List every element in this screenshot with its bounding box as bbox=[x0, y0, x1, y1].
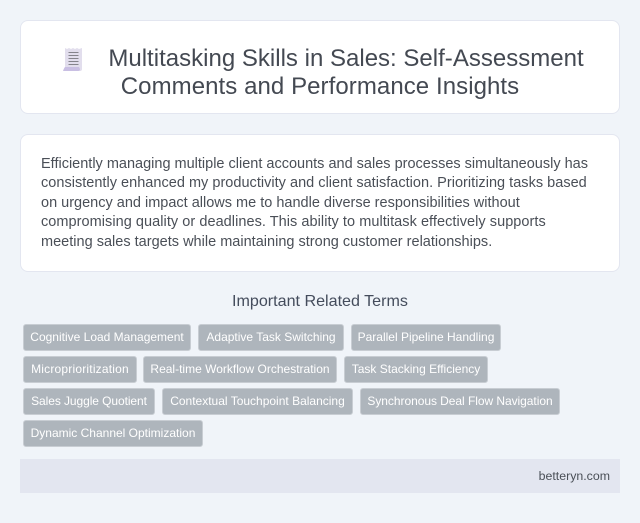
tag list: Real-time Workflow Orchestration bbox=[150, 362, 330, 376]
summary text: compromising quality or deadlines. This ability to multitask effectively supports bbox=[41, 214, 546, 230]
tag list: Sales Juggle Quotient bbox=[31, 394, 147, 408]
title: Multitasking Skills in Sales: Self-Assessment bbox=[108, 45, 584, 72]
footer brand: betteryn.com bbox=[539, 469, 610, 483]
tag list bbox=[23, 324, 560, 447]
header panel bbox=[20, 20, 620, 114]
tag list: Microprioritization bbox=[31, 362, 129, 376]
tag list: Task Stacking Efficiency bbox=[352, 362, 480, 376]
summary text bbox=[41, 156, 588, 250]
footer bar bbox=[20, 459, 620, 493]
summary text: Efficiently managing multiple client accounts and sales processes simultaneously has bbox=[41, 156, 588, 172]
summary panel bbox=[20, 134, 620, 272]
summary text: on urgency and impact allows me to handle diverse responsibilities without bbox=[41, 195, 520, 211]
tag list: Dynamic Channel Optimization bbox=[31, 426, 195, 440]
title bbox=[108, 45, 584, 100]
summary text: consistently enhanced my productivity and client satisfaction. Prioritizing tasks based bbox=[41, 175, 587, 191]
summary text: meeting sales targets while maintaining strong customer relationships. bbox=[41, 234, 492, 250]
heading: important related terms: Important Related Terms bbox=[232, 292, 408, 310]
icon: document scroll bbox=[63, 48, 82, 71]
tag list: Synchronous Deal Flow Navigation bbox=[367, 394, 553, 408]
tag list: Parallel Pipeline Handling bbox=[358, 330, 494, 344]
tag list: Contextual Touchpoint Balancing bbox=[170, 394, 345, 408]
tag list: Adaptive Task Switching bbox=[206, 330, 336, 344]
tag list: Cognitive Load Management bbox=[30, 330, 184, 344]
title: Comments and Performance Insights bbox=[121, 73, 519, 100]
